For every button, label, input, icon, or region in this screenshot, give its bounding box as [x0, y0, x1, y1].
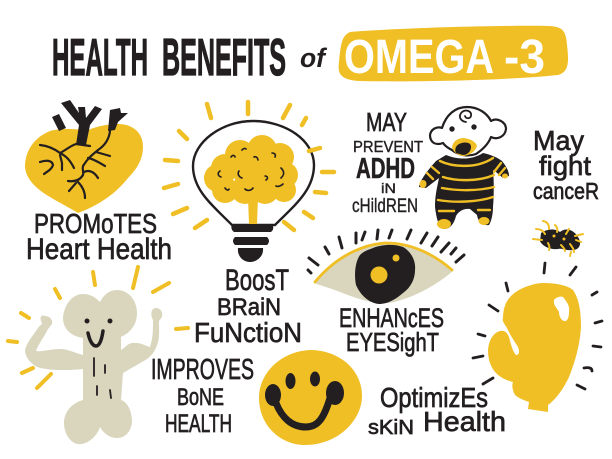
- text: improves bone health: HEALTH: [165, 410, 232, 438]
- text: boost brain function: [194, 264, 302, 348]
- text: BENEFITS: [162, 29, 286, 87]
- text: may prevent adhd in children: iN: [381, 180, 396, 196]
- text: promotes heart health: Heart Health: [26, 233, 172, 266]
- icon: eye: [308, 230, 464, 304]
- text: improves bone health: IMPROVES: [151, 354, 254, 386]
- title badge: omega-3: -3: [504, 31, 545, 84]
- bone rays: [8, 267, 188, 388]
- text: may prevent adhd in children: MAY: [366, 107, 407, 137]
- text: may prevent adhd in children: cHildREN: [352, 196, 418, 217]
- text: improves bone health: [151, 354, 254, 438]
- icon: light bulb with brain: [193, 121, 314, 262]
- text: may fight cancer: canceR: [533, 178, 599, 204]
- icon: cancer cell: [533, 221, 583, 256]
- text: may prevent adhd in children: ADHD: [356, 153, 415, 185]
- text: boost brain function: BRaiN: [217, 294, 281, 321]
- icon: baby: [419, 107, 509, 229]
- icon: heart with arteries: [25, 100, 143, 213]
- text: may fight cancer: May: [533, 125, 584, 156]
- title badge: omega-3: OMEGA: [344, 31, 494, 84]
- text: boost brain function: BoosT: [225, 264, 289, 297]
- text: optimizes skin health: Health: [423, 406, 506, 437]
- title: health benefits: HEALTH: [52, 29, 148, 87]
- icon: flexing bone: [25, 290, 162, 444]
- text: may prevent adhd in children: [352, 107, 423, 217]
- text: optimizes skin health: OptimizEs: [380, 382, 488, 413]
- bulb rays: [164, 102, 334, 230]
- text: promotes heart health: PROMoTES: [34, 208, 157, 239]
- text: boost brain function: FuNctioN: [194, 317, 302, 348]
- text: improves bone health: BoNE: [177, 384, 224, 411]
- text: enhances eyesight: ENHANcES: [339, 303, 444, 333]
- text: optimizes skin health: sKiN: [368, 417, 414, 439]
- text: promotes heart health: [26, 208, 172, 266]
- glove action marks: [473, 263, 602, 389]
- text: may prevent adhd in children: PREVENT: [353, 139, 423, 156]
- text: enhances eyesight: [339, 303, 444, 357]
- text: may fight cancer: [533, 125, 599, 204]
- text: enhances eyesight: EYESighT: [346, 327, 439, 357]
- icon: smiley skin: [259, 350, 362, 445]
- title: of: of: [300, 43, 328, 73]
- icon: boxing glove: [488, 283, 581, 412]
- text: optimizes skin health: [368, 382, 506, 439]
- text: may fight cancer: fight: [539, 151, 591, 181]
